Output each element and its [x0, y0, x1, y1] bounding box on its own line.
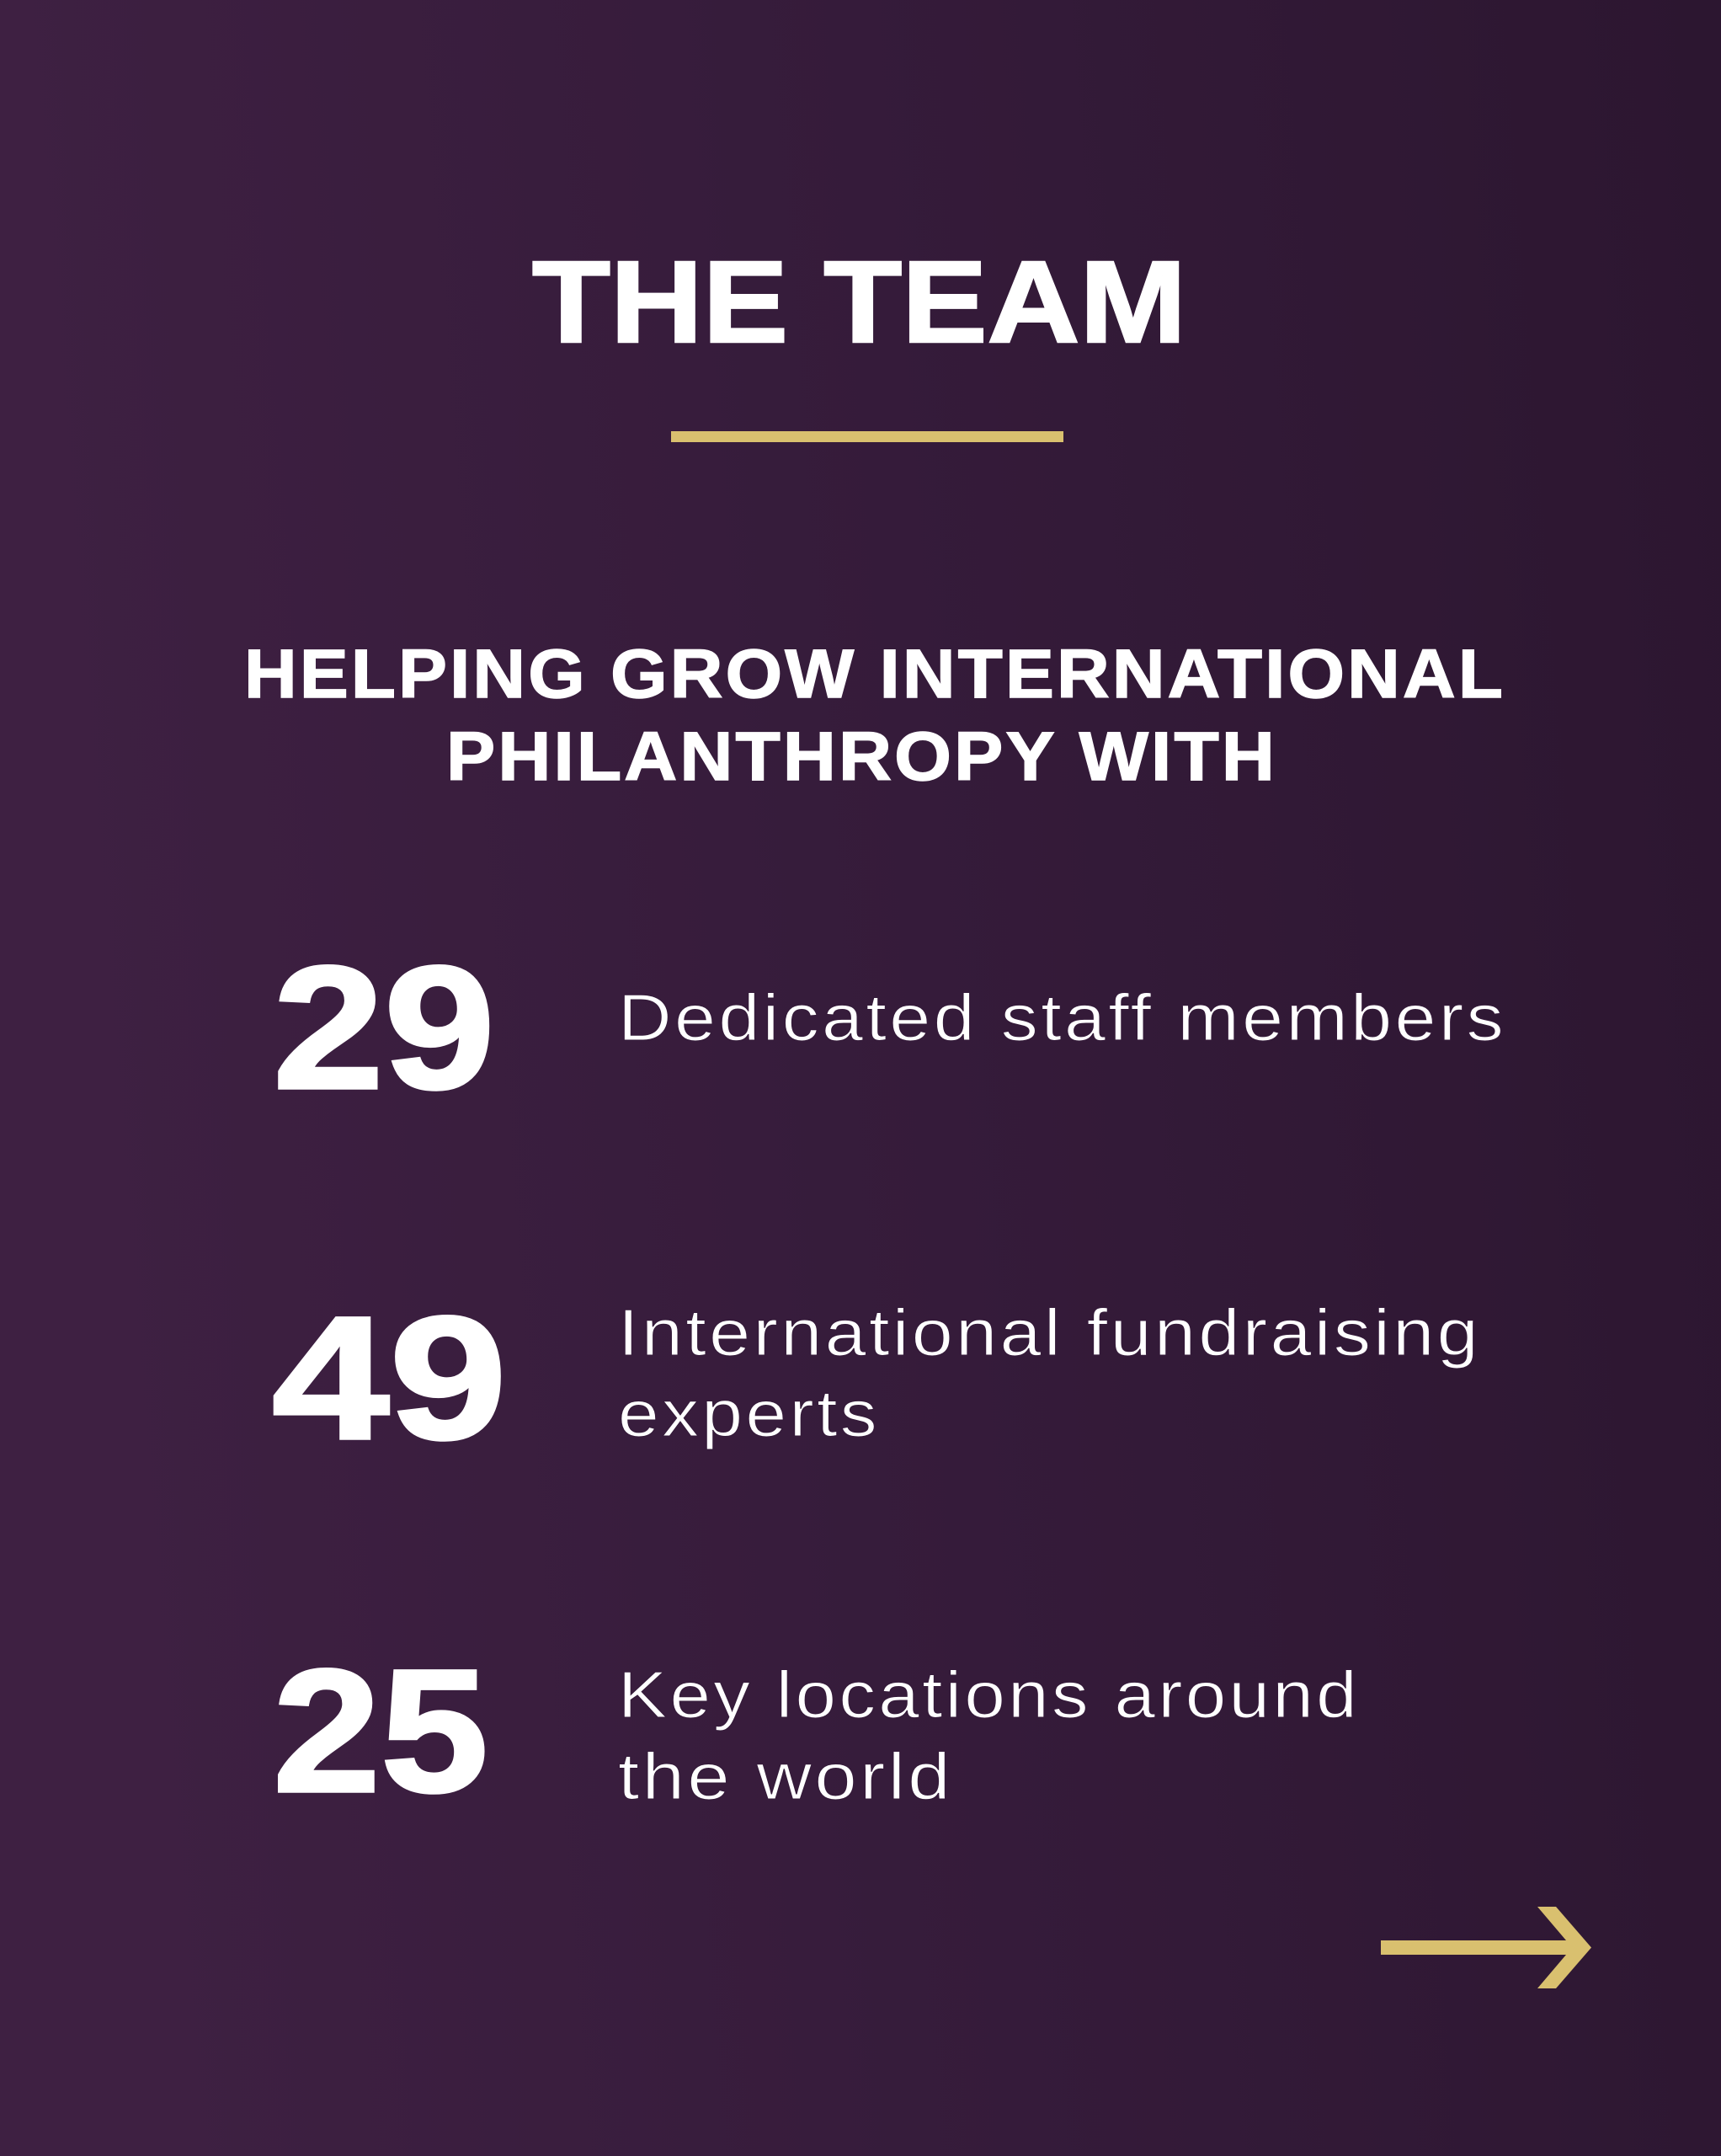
stat row: staff [273, 931, 1506, 1126]
subtitle heading [244, 636, 1505, 795]
label: dedicated staff members: Dedicated staff members [618, 980, 1506, 1054]
label: key locations around the world [618, 1657, 1360, 1813]
number: 29: 29 [273, 931, 495, 1126]
label: international fundraising experts [618, 1295, 1481, 1450]
label: international fundraising experts: experts [618, 1376, 880, 1450]
icon: gold arrow [1381, 1907, 1591, 1988]
subtitle heading: PHILANTHROPY WITH [446, 718, 1277, 795]
label: key locations around the world: the world [618, 1739, 953, 1813]
stat row: fundraising experts [272, 1281, 1481, 1476]
label: international fundraising experts: International fundraising [618, 1295, 1481, 1369]
gold divider under title [671, 431, 1063, 442]
stat row: locations [273, 1634, 1360, 1829]
number: 25: 25 [273, 1634, 488, 1829]
title: THE TEAM [532, 237, 1186, 367]
label: key locations around the world: Key locations around [618, 1657, 1360, 1732]
subtitle heading: HELPING GROW INTERNATIONAL [244, 636, 1505, 712]
number: 49: 49 [272, 1281, 507, 1476]
